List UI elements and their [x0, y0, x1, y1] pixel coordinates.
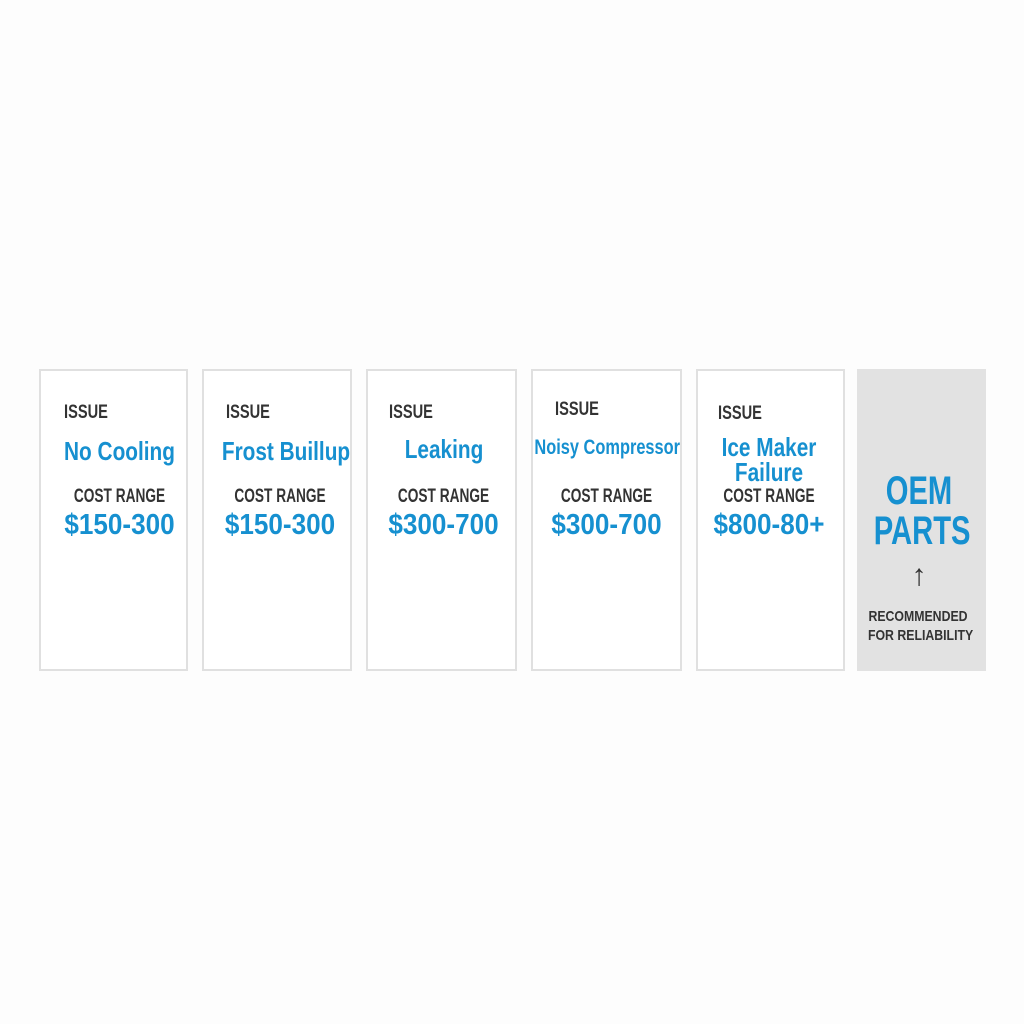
cost label: COST RANGE	[398, 486, 489, 507]
title: No Cooling	[64, 436, 175, 466]
title: Leaking	[405, 434, 483, 464]
label: issue: ISSUE	[718, 403, 762, 424]
cost label: COST RANGE	[723, 486, 815, 507]
heading: oem parts: PARTS	[874, 509, 971, 553]
card: ice maker failure	[696, 369, 845, 671]
text: recommended: FOR RELIABILITY	[868, 627, 973, 644]
title: Noisy Compressor	[534, 436, 680, 459]
label: issue: ISSUE	[226, 402, 270, 423]
title: Frost Buillup	[222, 436, 350, 466]
price: $300-700	[551, 509, 662, 541]
price: $150-300	[225, 509, 335, 541]
price: $150-300	[64, 509, 175, 541]
heading: oem parts	[874, 469, 971, 553]
label: issue: ISSUE	[389, 402, 433, 423]
heading: oem parts: OEM	[886, 469, 952, 513]
title: Ice Maker	[722, 432, 816, 462]
title	[722, 432, 816, 487]
card: noisy compressor	[531, 369, 682, 671]
card: no cooling	[39, 369, 188, 671]
text: recommended	[868, 608, 973, 644]
icon: up arrow: ↑	[912, 559, 926, 592]
card: frost buildup	[202, 369, 352, 671]
text: recommended: RECOMMENDED	[868, 608, 968, 625]
label: issue: ISSUE	[555, 399, 599, 420]
price: $300-700	[388, 509, 499, 541]
cost label: COST RANGE	[561, 486, 652, 507]
label: issue: ISSUE	[64, 402, 108, 423]
price: $800-80+	[713, 509, 825, 541]
cost label: COST RANGE	[74, 486, 165, 507]
title: Failure	[735, 457, 803, 487]
cost label: COST RANGE	[234, 486, 326, 507]
panel: oem parts	[857, 369, 986, 671]
card: leaking	[366, 369, 517, 671]
